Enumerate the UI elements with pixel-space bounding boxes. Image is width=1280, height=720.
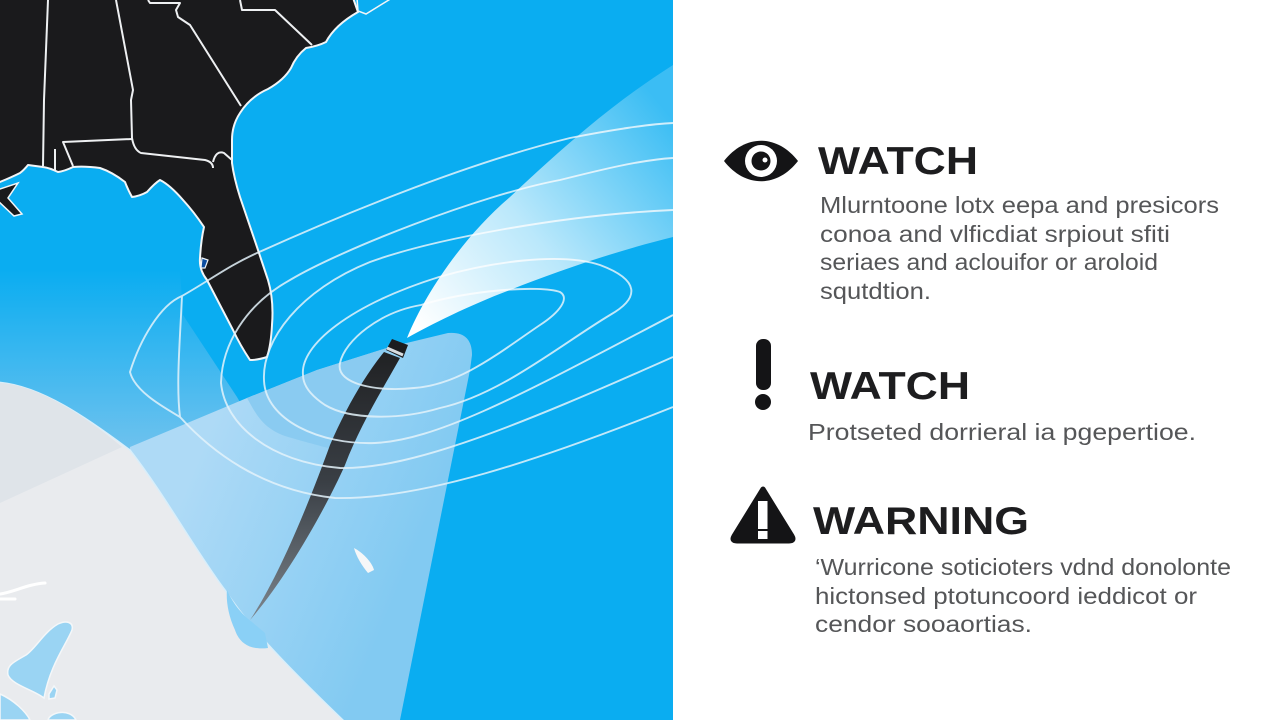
body text: warning: cendor sooaortias. xyxy=(815,611,1032,637)
heading: watch: WATCH xyxy=(810,365,970,408)
track cap xyxy=(386,339,408,358)
section: watch 2 xyxy=(755,339,1196,445)
wind contour lines xyxy=(130,123,673,498)
section: warning xyxy=(733,489,1231,637)
grey landmass xyxy=(0,382,345,720)
body text: warning: hictonsed ptotuncoord ieddicot or xyxy=(815,583,1197,609)
gulf shading xyxy=(0,285,240,449)
coastal bay xyxy=(227,590,268,648)
map panel xyxy=(0,0,673,720)
body text: watch: conoa and vlficdiat srpiout sfiti xyxy=(820,221,1170,247)
lakes on landmass xyxy=(0,622,76,720)
icon: eye xyxy=(724,141,798,181)
icon: warning triangle xyxy=(733,489,793,541)
wind beam xyxy=(407,65,673,338)
icon: exclamation mark xyxy=(755,339,771,410)
small island xyxy=(354,548,374,573)
forecast cone xyxy=(100,333,472,720)
body text: watch xyxy=(820,192,1219,304)
heading: warning: WARNING xyxy=(813,500,1029,543)
heading: watch: WATCH xyxy=(818,140,978,183)
white rivers xyxy=(0,583,45,599)
body text: watch: Protseted dorrieral ia pgepertioe. xyxy=(808,419,1196,445)
body text: warning: ‘Wurricone soticioters vdnd donolonte xyxy=(815,554,1231,580)
body text: watch: squtdtion. xyxy=(820,278,931,304)
cone overlap shade xyxy=(247,347,390,450)
land: southeastern United States xyxy=(0,0,358,360)
body text: watch: seriaes and aclouifor or aroloid xyxy=(820,249,1158,275)
state borders xyxy=(43,0,312,170)
tampa bay xyxy=(201,258,208,268)
delta xyxy=(0,183,22,216)
northeast coastal inlet xyxy=(357,0,392,14)
body text: watch: Mlurntoone lotx eepa and presicors xyxy=(820,192,1219,218)
landmass shaded band xyxy=(0,383,122,503)
body text: warning xyxy=(815,554,1231,637)
storm track xyxy=(250,339,408,620)
section: watch 1 xyxy=(724,140,1219,304)
